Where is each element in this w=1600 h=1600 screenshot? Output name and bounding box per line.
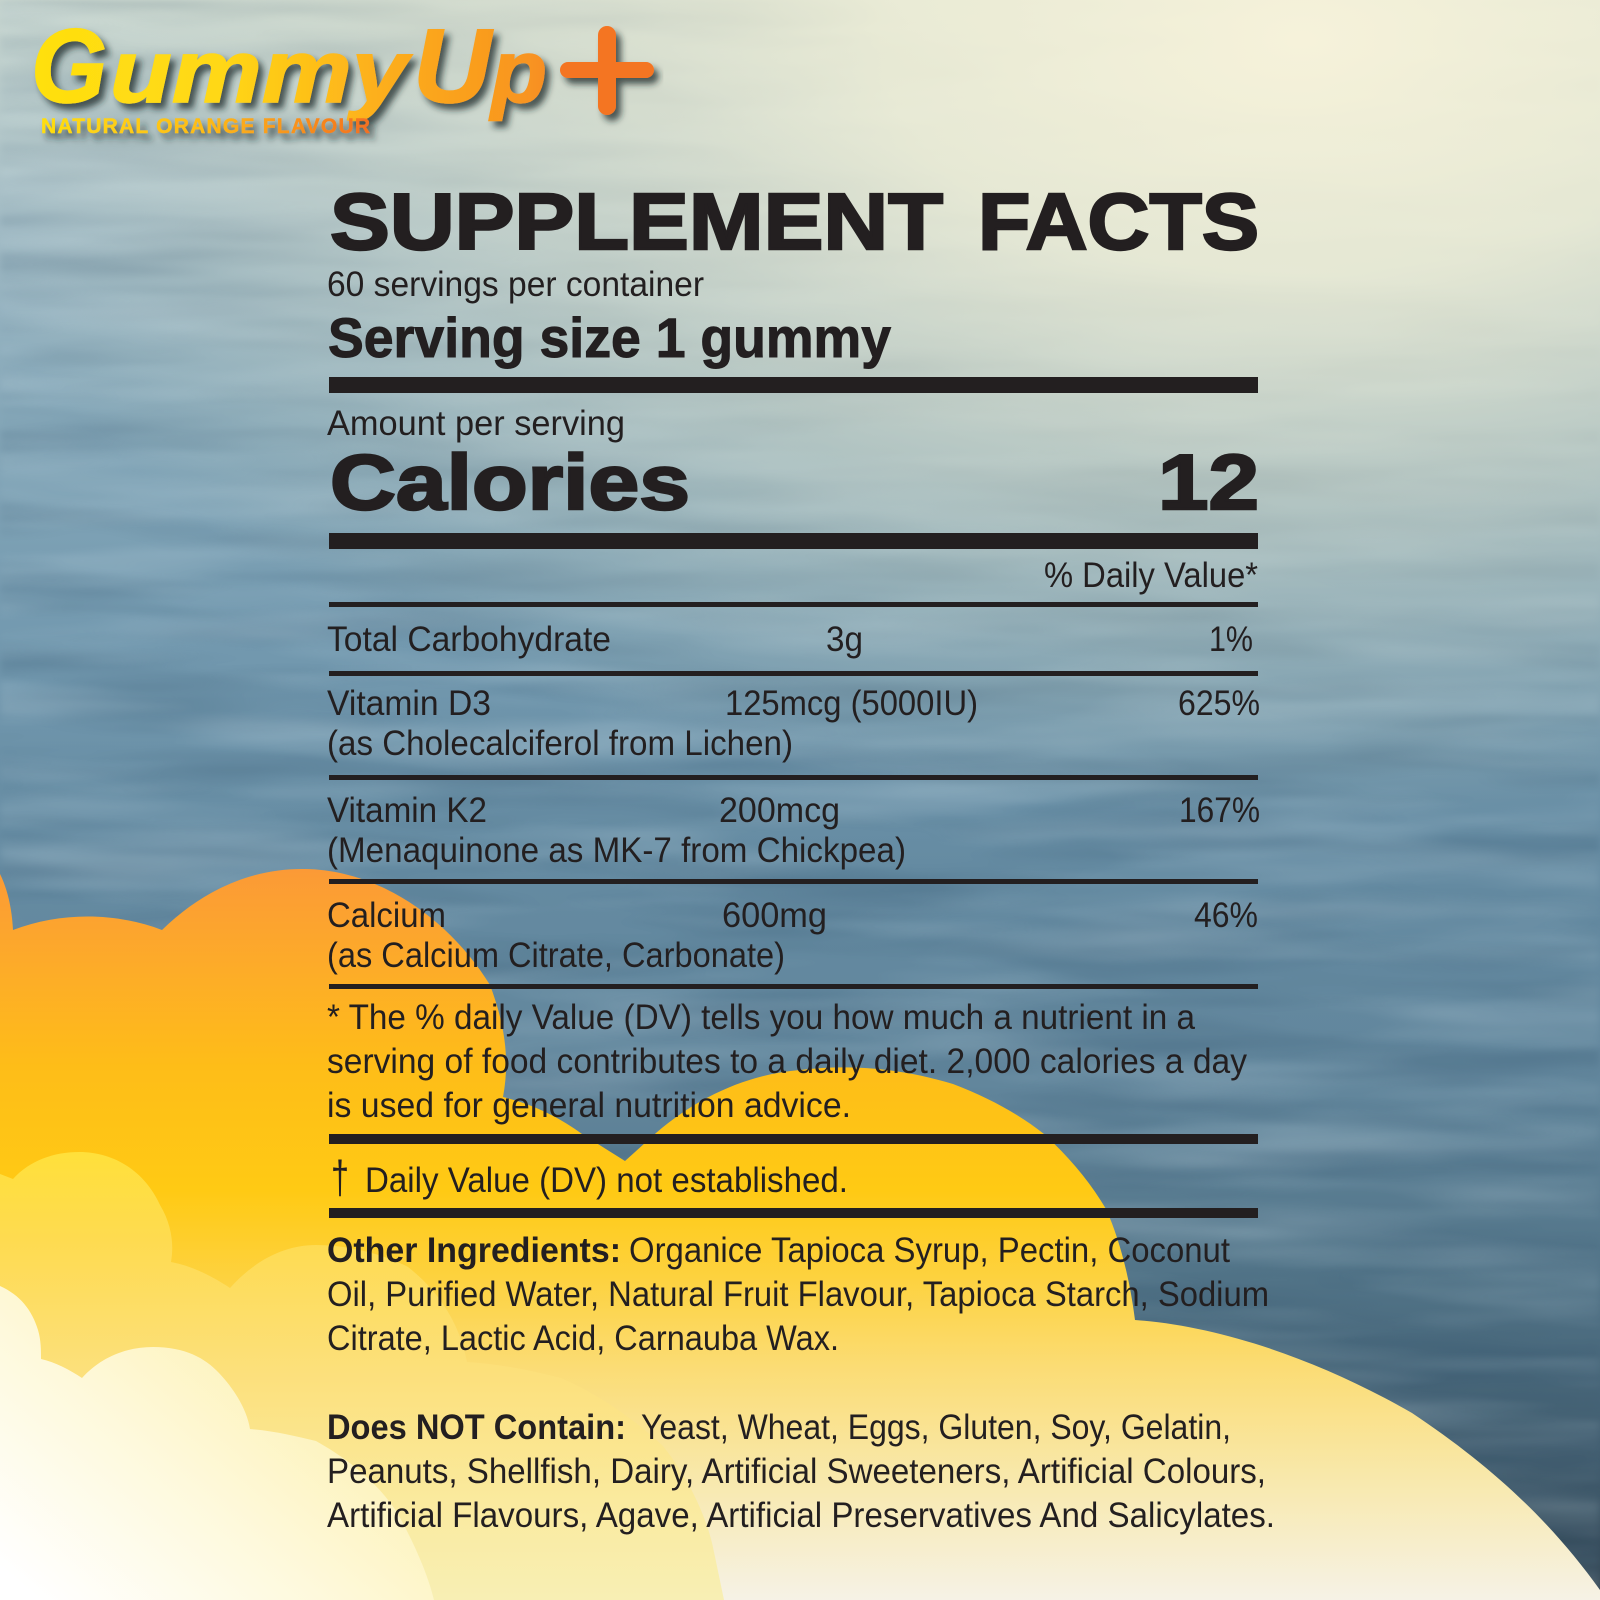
rule xyxy=(329,1208,1258,1218)
dagger note xyxy=(331,1151,848,1203)
row: vitamin D3: (as Cholecalciferol from Lichen) xyxy=(327,724,793,763)
rule xyxy=(329,377,1258,393)
logo wordmark: ummy xyxy=(110,21,413,121)
row: total carbohydrate xyxy=(327,620,1253,659)
rule xyxy=(329,775,1258,780)
daily value footnote: is used for general nutrition advice. xyxy=(327,1086,851,1125)
row: calcium: 600mg xyxy=(722,896,827,935)
logo tagline: NATURAL ORANGE FLAVOUR xyxy=(41,115,370,138)
row: total carbohydrate: 1% xyxy=(1209,620,1253,659)
does not contain xyxy=(327,1408,1275,1535)
row: vitamin K2 xyxy=(327,791,1260,870)
daily value footnote xyxy=(327,998,1247,1125)
dagger note: Daily Value (DV) not established. xyxy=(365,1161,848,1200)
does not contain: Does NOT Contain: xyxy=(327,1408,626,1447)
row: total carbohydrate: Total Carbohydrate xyxy=(327,620,611,659)
logo wordmark: U xyxy=(413,8,493,125)
row: calcium: Calcium xyxy=(327,896,446,935)
row: vitamin D3 xyxy=(327,684,1260,763)
does not contain: Peanuts, Shellfish, Dairy, Artificial Sweeteners, Artificial Colours, xyxy=(327,1452,1266,1491)
calories row xyxy=(330,438,1259,526)
calories row: Calories xyxy=(330,438,690,526)
pale cloud xyxy=(0,1286,434,1600)
row: vitamin K2: 167% xyxy=(1179,791,1260,830)
amount per serving: Amount per serving xyxy=(327,404,625,443)
other ingredients: Citrate, Lactic Acid, Carnauba Wax. xyxy=(327,1319,839,1358)
serving size: Serving size 1 gummy xyxy=(328,306,891,369)
row: vitamin K2: Vitamin K2 xyxy=(327,791,487,830)
logo wordmark: p xyxy=(489,21,547,121)
dagger note: † xyxy=(331,1151,349,1203)
row: vitamin D3: 625% xyxy=(1178,684,1260,723)
other ingredients: Organice Tapioca Syrup, Pectin, Coconut xyxy=(629,1231,1230,1270)
row: vitamin K2: 200mcg xyxy=(719,791,840,830)
row: total carbohydrate: 3g xyxy=(826,620,863,659)
row: vitamin D3: Vitamin D3 xyxy=(327,684,491,723)
orange cloud xyxy=(0,869,1600,1600)
title: SUPPLEMENT xyxy=(330,177,943,266)
other ingredients xyxy=(327,1231,1269,1358)
rule xyxy=(329,1134,1258,1144)
rule xyxy=(329,671,1258,676)
other ingredients: Oil, Purified Water, Natural Fruit Flavour, Tapioca Starch, Sodium xyxy=(327,1275,1269,1314)
rule xyxy=(329,602,1258,607)
yellow cloud xyxy=(0,1152,724,1600)
row: vitamin D3: 125mcg (5000IU) xyxy=(725,684,978,723)
does not contain: Artificial Flavours, Agave, Artificial Preservatives And Salicylates. xyxy=(327,1496,1275,1535)
logo wordmark xyxy=(31,8,547,125)
logo wordmark: G xyxy=(31,8,107,125)
logo: GummyUp+ xyxy=(31,8,654,138)
servings per container: 60 servings per container xyxy=(327,265,704,304)
rule xyxy=(329,533,1258,549)
rule xyxy=(329,879,1258,884)
row: calcium: (as Calcium Citrate, Carbonate) xyxy=(327,936,785,975)
logo plus sign xyxy=(560,26,654,115)
row: calcium: 46% xyxy=(1194,896,1258,935)
does not contain: Yeast, Wheat, Eggs, Gluten, Soy, Gelatin, xyxy=(641,1408,1231,1447)
title: FACTS xyxy=(978,177,1259,266)
daily value header: % Daily Value* xyxy=(1044,556,1258,595)
title xyxy=(330,177,1259,266)
rule xyxy=(329,984,1258,989)
other ingredients: Other Ingredients: xyxy=(327,1231,621,1270)
row: calcium xyxy=(327,896,1258,975)
daily value footnote: * The % daily Value (DV) tells you how much a nutrient in a xyxy=(327,998,1196,1037)
calories row: 12 xyxy=(1158,438,1259,526)
row: vitamin K2: (Menaquinone as MK-7 from Chickpea) xyxy=(327,831,906,870)
daily value footnote: serving of food contributes to a daily diet. 2,000 calories a day xyxy=(327,1042,1247,1081)
